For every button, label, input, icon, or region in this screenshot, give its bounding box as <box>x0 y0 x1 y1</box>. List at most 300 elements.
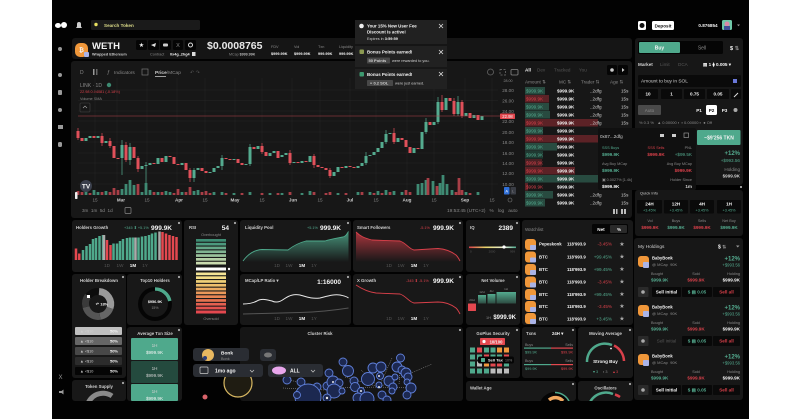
donut chart <box>86 292 111 316</box>
holding 2: Sell initial <box>657 338 676 344</box>
holding 1 <box>638 256 741 297</box>
panel: txns <box>522 327 576 378</box>
notification: SOL earned: Bonus Points earned! <box>367 72 413 77</box>
row market caps: $999.9K <box>557 152 575 158</box>
watchlist rows: ★ <box>619 291 625 298</box>
trades table <box>525 65 629 206</box>
row traders and ages: ..2dfg <box>590 88 602 94</box>
panel: holders growth: 999.9K <box>151 225 172 232</box>
row amounts: $999.9K <box>526 88 544 94</box>
panel: trader tooltip: ▣ 0.0027% [1.4k] <box>602 178 632 182</box>
watchlist rows: ★ <box>619 266 625 273</box>
holding 3: @ MCap 90K <box>652 360 678 365</box>
row traders and ages <box>590 88 629 206</box>
y axis labels: 24.00 <box>502 109 514 114</box>
panel: quick info <box>635 190 743 236</box>
watchlist rows: +99.45% <box>594 292 612 297</box>
panel: moving average <box>578 327 633 378</box>
buy sell tabs: Sell <box>698 46 706 52</box>
timeframes: 1M <box>299 316 305 321</box>
buy action button: ~$9'256 TKN <box>704 136 734 142</box>
trades table: You <box>579 68 587 72</box>
panel: price chart <box>71 61 632 218</box>
timeframes: +3.45% <box>670 208 683 212</box>
row market caps: $999.9K <box>557 160 575 166</box>
contract: 0x4g..2hg4 <box>170 53 191 57</box>
tooltip: 10% <box>505 359 513 363</box>
y axis labels: 20.00 <box>502 130 514 135</box>
holding 3: $999.9K <box>651 376 669 380</box>
x axis labels: 15 <box>489 198 495 202</box>
price tag <box>500 114 515 119</box>
token selector pill: Bonk <box>221 350 233 356</box>
row amounts: $999.9K <box>526 160 544 166</box>
volume stats: Net Buy <box>722 219 736 223</box>
watchlist rows: BTC <box>539 304 548 309</box>
holding 2: Bought <box>651 321 664 325</box>
token name <box>92 41 127 56</box>
icon: bell <box>76 22 82 28</box>
timeframes: 1W <box>398 263 405 268</box>
row traders and ages: ..2dfg <box>590 104 602 110</box>
panel: net volume: 1H <box>486 316 491 320</box>
auto buttons: L <box>512 188 515 193</box>
token stats: $999.99K <box>294 52 311 56</box>
icon: chart settings <box>508 198 512 202</box>
holding 2: $ ▤ 0.05 <box>688 338 707 344</box>
token stats: Liquidity <box>339 45 353 49</box>
volume stats: $999.9K <box>667 225 685 230</box>
amount input <box>638 75 741 87</box>
watchlist rows: 118'993.9 <box>567 242 586 247</box>
panel: rsi: Overbought <box>201 233 222 237</box>
chart legend: Volume SMA <box>80 97 102 101</box>
holder list: 50% <box>110 358 118 364</box>
panel: iq: 2000 <box>489 250 496 254</box>
notification: fee discount: Expires in 3:59:59 <box>367 37 398 41</box>
panel: moving average: ▾ 3 <box>593 370 598 374</box>
trades table: All <box>525 68 531 72</box>
y axis labels: 14.00 <box>502 161 514 166</box>
donut chart: 15% <box>151 306 159 310</box>
x axis labels: 15 <box>431 198 437 202</box>
holding 2: @ MCap 90K <box>652 311 678 316</box>
y axis labels: 28.00 <box>502 88 514 93</box>
y axis labels: 10.00 <box>502 182 514 187</box>
token stats <box>271 45 354 56</box>
notification: fee discount <box>355 20 447 44</box>
timeframes: 1M <box>411 263 417 268</box>
holding 1: +12% <box>724 256 741 262</box>
holder list: ▲ <$10 <box>80 360 93 364</box>
panel: cluster risk: Cluster Risk <box>307 331 333 336</box>
row traders and ages: ..2dfg <box>590 112 602 118</box>
watchlist rows: 118'993.9 <box>567 254 586 259</box>
timeframes: 1D <box>104 263 111 268</box>
buy sell bar 1: $99.9K <box>561 350 573 354</box>
row amounts: $999.9K <box>526 136 544 142</box>
panel: average txn size: 1H <box>152 366 157 371</box>
panel: average txn size: Average Txn Size <box>137 331 173 336</box>
trades table: Tracked <box>554 68 571 72</box>
check grid <box>470 348 509 374</box>
panel: wallet age: Wallet Age <box>470 386 492 390</box>
x axis labels: Jul <box>347 198 353 202</box>
trades table: MC ⇅ <box>559 80 571 84</box>
order type: Market <box>638 62 653 67</box>
row market caps: $999.9K <box>557 128 575 134</box>
row amounts: $999.9K <box>526 128 544 134</box>
line chart <box>356 285 460 314</box>
notification: bonus points: Bonus Points earned! <box>367 50 413 54</box>
panel: rsi: 54 <box>222 225 229 232</box>
panel: liquidity pool <box>240 220 351 272</box>
panel: trader tooltip: $999.9K <box>675 168 693 173</box>
gauge <box>587 344 624 362</box>
icon: calendar <box>125 208 131 214</box>
row amounts: $999.9K <box>526 144 544 150</box>
row market caps: $999.9K <box>557 112 575 118</box>
timeframes: 1W <box>286 316 293 321</box>
amount input: Amount to buy in SOL <box>641 78 688 84</box>
panel: trader tooltip: +$99.5K <box>675 152 693 157</box>
y axis labels: 28.00 <box>504 79 512 83</box>
row traders and ages: ..2dfg <box>590 192 602 198</box>
holder list: ▲ <$10 <box>80 340 93 344</box>
holding 3: Bought <box>651 370 664 374</box>
top navigation bar <box>55 20 740 30</box>
pnl: $999.9K <box>723 174 741 178</box>
timeframes <box>274 316 317 321</box>
holding 2: $999.9K <box>687 326 705 332</box>
volume stats: $999.9K <box>693 225 711 230</box>
holding 3 <box>638 354 741 395</box>
panel: trader tooltip: $999.9K <box>602 152 620 157</box>
buy sell bar 2: $99.9K <box>561 367 573 371</box>
watchlist rows: -3.45% <box>597 304 612 309</box>
contract: Contract <box>150 53 165 57</box>
panel: smart followers <box>353 220 463 272</box>
panel: trader tooltip: SSS Sells <box>648 146 665 150</box>
quick amounts: 0.75 <box>690 92 699 96</box>
panel: average txn size: $999.9K <box>146 396 164 401</box>
panel: liquidity pool: 999.9K <box>320 225 341 232</box>
panel: smart followers: Smart Followers <box>357 225 391 230</box>
watchlist rows: ★ <box>619 303 625 310</box>
auto and presets <box>638 105 738 115</box>
gauge <box>86 390 114 401</box>
panel: trader tooltip: Avg Buy MCap <box>667 162 692 166</box>
holding 2: Sell all <box>719 338 734 344</box>
auto and presets: P1 <box>696 108 702 113</box>
chart legend <box>80 83 121 112</box>
holding 1: Bought <box>651 272 664 276</box>
row traders and ages: 15s <box>621 112 629 118</box>
icon: logo <box>55 22 67 28</box>
candlesticks <box>78 95 482 195</box>
watchlist rows: 118'993.9 <box>567 267 586 272</box>
holding 3: $999.9K <box>723 376 741 380</box>
token coin: ₿ <box>79 47 84 54</box>
timeframes: 1Y <box>142 263 148 268</box>
quick amounts: 0.05 <box>714 92 723 96</box>
holder list: ▲ <$10 <box>80 370 93 374</box>
holding 2: Holding <box>727 321 740 325</box>
notification: bonus points: were rewarded to you. <box>392 59 430 63</box>
x axis labels: Sep <box>461 198 469 202</box>
y axis labels: 16.00 <box>502 151 514 156</box>
panel: trader tooltip: $999.9K <box>647 152 665 157</box>
trades table: Trader ⇅ <box>581 80 600 84</box>
y axis labels: 18.00 <box>502 140 514 145</box>
social buttons: ★ <box>139 42 144 49</box>
holder list <box>75 327 122 375</box>
panel: average txn size: 1H <box>152 389 157 394</box>
row amounts: $999.9K <box>526 176 544 182</box>
holding 2: $999.9K <box>723 326 741 332</box>
x axis labels: May <box>231 198 240 202</box>
row amounts: $999.9K <box>526 192 544 198</box>
panel: smart followers: 999.9K <box>433 225 454 232</box>
watchlist rows: +99.45% <box>594 267 612 272</box>
pnl: Holding <box>724 167 740 172</box>
holding 1: Holding <box>727 272 740 276</box>
toggle <box>592 224 628 234</box>
donut chart <box>138 287 172 321</box>
tradingview badge: TV <box>82 184 91 190</box>
chart toolbar: ↶ ↷ <box>190 70 201 76</box>
panel: holder breakdown <box>72 274 126 378</box>
panel: iq: 2389 <box>499 225 513 232</box>
panel: top 10 holders <box>127 274 182 325</box>
order type <box>638 61 732 68</box>
holding 2: Sold <box>692 321 700 325</box>
panel: txns: 24H ▾ <box>552 331 564 336</box>
panel: txns: Txns <box>526 331 537 336</box>
holding 2: BabyBonk <box>652 304 673 310</box>
token coin <box>75 43 89 57</box>
watchlist rows: 118'993.9 <box>567 279 586 284</box>
watchlist rows: 118'993.9 <box>567 316 586 321</box>
auto and presets: P2 <box>709 108 715 113</box>
panel: x growth: -345 ⬍ -5.1% <box>406 278 429 283</box>
holder list: 50% <box>110 328 118 334</box>
timeframes <box>104 263 148 268</box>
row traders and ages: 15s <box>621 88 629 94</box>
volume stats: Sells <box>698 219 706 223</box>
panel: trader tooltip: PNL <box>685 146 692 150</box>
token stats: $999.99K <box>271 52 288 56</box>
cluster links <box>283 358 432 395</box>
holding 3: +12% <box>724 354 741 360</box>
area chart <box>356 232 460 262</box>
y axis labels: 12.00 <box>502 171 514 176</box>
timeframes: +3.45% <box>643 208 657 212</box>
row amounts: $999.9K <box>526 104 544 110</box>
order type: ▤ 1 ⧫ 0.005 ▾ <box>703 61 732 68</box>
holder list: 50% <box>110 348 118 354</box>
row traders and ages: ..2dfg <box>590 120 602 126</box>
row amounts: $999.9K <box>526 112 544 118</box>
y axis labels: 26.00 <box>502 98 514 104</box>
panel: net volume <box>466 274 520 325</box>
panel: iq <box>466 220 520 272</box>
panel: smart followers: -5.1% <box>420 226 431 230</box>
panel: rsi: RSI <box>189 225 196 230</box>
panel: holders growth: +345 ⬍ +5.1% <box>124 225 149 230</box>
panel: holders growth: Holders Growth <box>76 225 109 230</box>
volume stats: $999.9K <box>720 225 738 230</box>
panel: net volume: 12H <box>479 290 485 294</box>
timeframes: 1M <box>411 316 417 321</box>
panel: moving average: Strong Buy <box>593 359 618 364</box>
panel: iq: 0 <box>470 250 472 254</box>
watchlist rows: BTC <box>539 254 548 259</box>
all selector pill <box>268 364 323 377</box>
chart toolbar: ƒ <box>107 70 110 76</box>
panel: top 10 holders: Top10 Holders <box>140 278 170 283</box>
panel: trader tooltip: $999.9K <box>602 168 620 173</box>
holding 2 <box>638 304 741 346</box>
row amounts: $999.9K <box>526 184 544 190</box>
clock and scale: 19:53:45 (UTC+2) % log auto <box>447 208 518 214</box>
panel: net volume: Net Volume <box>481 278 505 283</box>
row market caps <box>557 88 575 206</box>
panel: average txn size: $999.9K <box>146 373 164 378</box>
timeframes <box>274 263 317 268</box>
watchlist rows: 118'993.9 <box>567 292 586 297</box>
row traders and ages: ..2dfg <box>590 200 602 206</box>
panel: rsi: Oversold <box>203 317 219 321</box>
panel: holder breakdown: ↶ 18% <box>95 302 109 306</box>
notification: bonus points: 50 Points <box>368 58 387 63</box>
row amounts: $999.9K <box>526 200 544 206</box>
auto and presets: P3 <box>722 108 728 113</box>
panel: iq: 999 <box>510 250 515 254</box>
panel: average txn size: $999.9K <box>146 350 164 355</box>
notification: fee discount: Your 15% New User Fee <box>367 24 417 28</box>
panel: x growth <box>353 274 463 325</box>
watchlist rows: ★ <box>619 316 625 322</box>
tooltip: Sell Tax <box>488 358 504 363</box>
row traders and ages: ..2dfg <box>590 96 602 102</box>
social buttons: X <box>176 43 180 49</box>
social buttons <box>136 40 196 50</box>
panel: trader tooltip: SSS Buys <box>602 146 619 150</box>
donut chart <box>540 392 570 401</box>
tradingview badge <box>80 180 92 192</box>
watchlist rows: -3.45% <box>597 279 612 284</box>
panel: net volume: 4H <box>490 289 493 293</box>
left sidebar icons <box>58 47 64 394</box>
row traders and ages: 15s <box>621 96 629 102</box>
x axis labels: Apr <box>175 198 183 202</box>
token stats: Vol <box>294 45 299 49</box>
panel: x growth: X Growth <box>357 278 376 283</box>
holding 1: Sell initial <box>656 290 677 294</box>
tooltip <box>478 356 514 364</box>
grid <box>78 78 498 197</box>
panel: mcap lp ratio: 1:16000 <box>317 279 341 286</box>
notification: SOL earned: were just earned. <box>395 82 424 86</box>
panel: moving average: ▴ 3 <box>613 370 618 374</box>
holding 2: +$993.56 <box>722 312 741 316</box>
row traders and ages: 15s <box>621 120 629 126</box>
watchlist rows: +3.45% <box>596 316 612 321</box>
buy sell bar 2 <box>524 359 573 371</box>
cluster bubbles <box>282 354 416 401</box>
age selector pill <box>193 364 263 377</box>
panel: oscillators: Oscillators <box>594 386 617 390</box>
token stats: Txn <box>318 45 324 49</box>
donut chart: $956.9K <box>148 300 162 304</box>
panel: trader tooltip: 1m <box>685 184 692 189</box>
holding 3: Sold <box>692 370 700 374</box>
x axis labels <box>92 198 495 202</box>
contract <box>150 52 196 57</box>
holder list: ▲ <$10 <box>80 350 93 354</box>
row market caps: $999.9K <box>557 200 575 206</box>
panel: liquidity pool: +5.1% <box>307 226 318 230</box>
timeframes: 4H <box>699 202 706 206</box>
buy action button <box>697 130 740 145</box>
holder list: 50% <box>110 338 118 344</box>
watchlist rows: ★ <box>619 278 625 286</box>
panel: watchlist <box>522 220 633 325</box>
quick amounts <box>638 89 741 99</box>
panel: trader tooltip <box>598 128 696 190</box>
token name: Wrapped Ethereum <box>92 52 127 56</box>
row amounts: $999.9K <box>526 96 544 102</box>
watchlist rows <box>525 239 625 324</box>
pin marker <box>202 394 208 400</box>
panel: watchlist: Watchlist <box>525 227 544 232</box>
holding 1: $999.9K <box>687 278 705 282</box>
row traders and ages: 15s <box>621 104 629 110</box>
notification: fee discount: Discount is active! <box>367 29 406 34</box>
timeframes: +3.45% <box>696 208 709 212</box>
panel: trader tooltip: Holder Since <box>670 178 692 182</box>
score badge: 10/100 <box>490 340 503 344</box>
x axis labels: 15 <box>317 198 323 202</box>
auto buttons <box>504 187 516 194</box>
token header panel <box>72 38 632 59</box>
panel: my holdings: My Holdings <box>638 244 665 250</box>
chart legend: 22.98 0.04081 (-0.18%) <box>80 90 121 94</box>
timeframes: 1D <box>386 263 393 268</box>
volume stats: Vol <box>647 219 653 223</box>
panel: mcap lp ratio: MCap/LP Ratio ▾ <box>245 278 279 283</box>
price: $0.0008765 <box>207 40 263 52</box>
price: MCap $999.99K <box>229 53 256 57</box>
panel: mcap lp ratio <box>240 274 351 325</box>
panel: rsi <box>184 220 238 325</box>
row market caps: $999.9K <box>557 120 575 126</box>
volume stats: $999.9K <box>641 225 659 230</box>
timeframes: 1Y <box>423 316 429 321</box>
timeframes: 1Y <box>311 263 317 268</box>
holding 1: $ ▤ 0.05 <box>688 290 707 294</box>
holding 1: @ MCap 90K <box>652 262 678 267</box>
holding 3: Sell initial <box>656 388 677 392</box>
pnl: +$993.56 <box>721 158 740 163</box>
timeframes <box>386 263 429 268</box>
iq slider <box>469 245 516 249</box>
holding 1: $999.9K <box>651 278 669 282</box>
buy sell bar 1: Buys <box>525 343 533 347</box>
chart toolbar <box>80 69 518 77</box>
holding 2: $999.9K <box>651 326 669 332</box>
